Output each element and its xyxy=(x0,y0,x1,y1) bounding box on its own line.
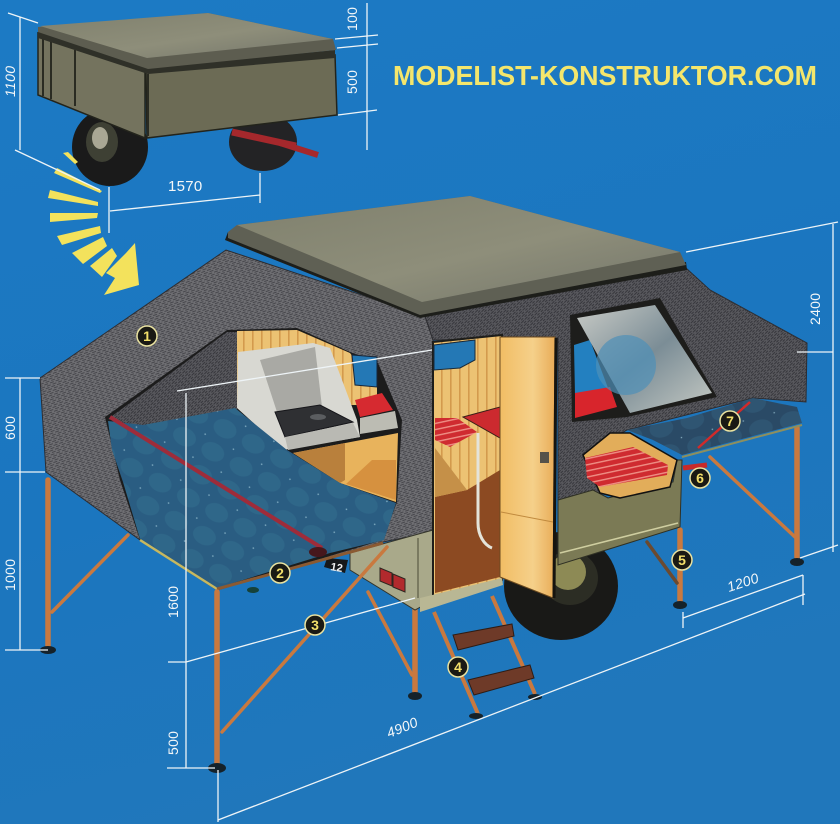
callout numbers: 7 xyxy=(726,413,734,429)
panel: side cutout with red seat xyxy=(583,433,677,498)
panel: quilted mattress left xyxy=(108,408,396,589)
rear and far legs xyxy=(40,428,804,700)
dimension labels: 1570 xyxy=(168,178,203,195)
callout numbers: 4 xyxy=(454,659,462,675)
panel: cutaway interior with kitchen xyxy=(105,328,402,590)
panel: interior doorway xyxy=(420,335,503,612)
callout numbers: 1 xyxy=(143,328,151,344)
dimension labels: 4900 xyxy=(384,714,420,741)
callout numbers: 3 xyxy=(311,617,319,633)
dimension labels: 100 xyxy=(344,7,360,31)
front leg with brace xyxy=(208,547,387,773)
panel: lower trailer body: 12 xyxy=(329,561,344,575)
dimension labels: 1600 xyxy=(165,586,181,618)
dimension labels: 1000 xyxy=(2,559,18,591)
panel: side window xyxy=(570,298,717,422)
wheel xyxy=(504,532,618,640)
dimension labels: 600 xyxy=(2,416,18,440)
panel: right mattress xyxy=(627,398,802,457)
website title: MODELIST-KONSTRUKTOR.COM xyxy=(393,60,817,91)
dimension labels: 500 xyxy=(344,70,360,94)
panel: canvas tent body xyxy=(40,250,807,590)
closed trailer illustration xyxy=(38,13,337,186)
icon: fold-out steps xyxy=(434,596,542,719)
arrow: transformation rays xyxy=(48,152,139,295)
dimension labels: 2400 xyxy=(807,293,823,325)
dimension labels: 1100 xyxy=(2,66,18,97)
dimension labels: 500 xyxy=(165,731,181,755)
callout numbers: 5 xyxy=(678,552,686,568)
callout numbers: 2 xyxy=(276,565,284,581)
dimension labels: 1200 xyxy=(725,570,761,595)
panel: open wooden door xyxy=(500,337,556,598)
callout numbers xyxy=(137,326,740,677)
panel: lower trailer body xyxy=(324,460,682,610)
callout numbers: 6 xyxy=(696,470,704,486)
icon: jack and red arrow xyxy=(683,402,750,468)
panel: raised roof xyxy=(225,196,687,318)
